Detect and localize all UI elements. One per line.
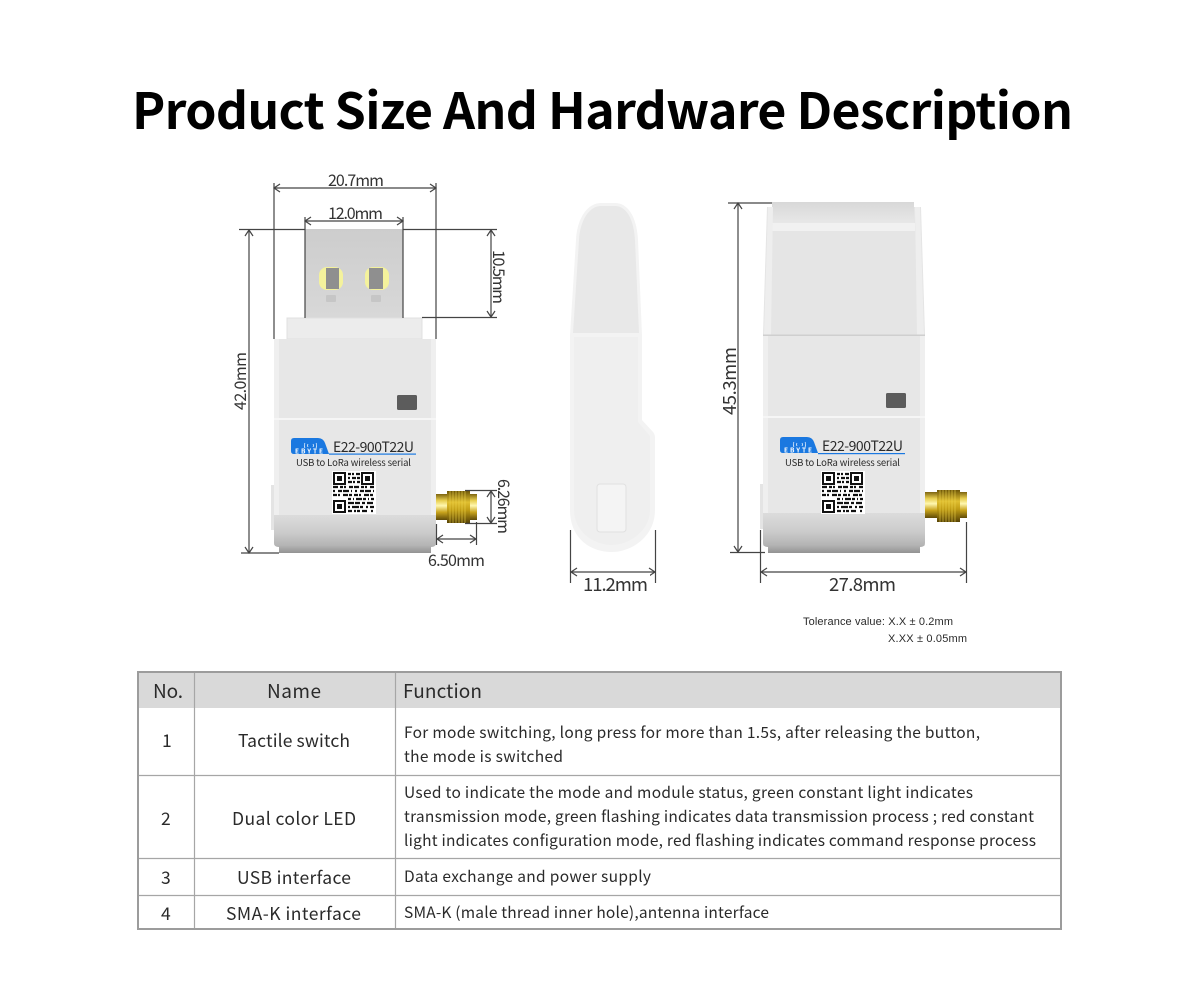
row 3	[161, 865, 651, 890]
product label: USB to LoRa wireless serial	[296, 455, 411, 469]
row 2: Dual color LED	[232, 806, 356, 831]
header row: Name	[267, 677, 321, 704]
dimension: 20.7mm: 20.7mm	[328, 167, 384, 191]
row 3: 3	[161, 865, 171, 890]
row 1: 1	[162, 728, 172, 753]
tolerance note: X.XX ± 0.05mm	[888, 633, 967, 645]
dimension: 6.26mm: 6.26mm	[493, 479, 517, 534]
title: Product Size And Hardware Description	[132, 72, 1073, 144]
device body	[760, 336, 925, 553]
panel: front view with USB plug	[227, 167, 517, 571]
dimension: 42.0mm	[227, 230, 305, 553]
dimension: 27.8mm: 27.8mm	[829, 571, 896, 597]
product label	[780, 436, 905, 469]
product label	[291, 437, 416, 469]
header row: Function	[403, 677, 482, 704]
side button	[597, 484, 626, 532]
tolerance note: Tolerance value: X.X ± 0.2mm	[803, 616, 953, 628]
dimension: 6.50mm: 6.50mm	[428, 547, 485, 571]
dimension: 45.3mm	[716, 203, 772, 552]
header row	[153, 677, 482, 704]
dimension: 11.2mm: 11.2mm	[583, 571, 648, 597]
dimension: 10.5mm	[403, 230, 512, 318]
dimension: 20.7mm	[274, 167, 436, 339]
dimension: 11.2mm	[570, 530, 656, 597]
row 4: 4	[161, 901, 171, 926]
USB cap shading	[573, 206, 639, 333]
row 1	[162, 721, 980, 767]
header row: No.	[153, 677, 183, 704]
device body	[271, 339, 436, 553]
row 2: light indicates configuration mode, red flashing indicates command response process	[404, 829, 1036, 851]
collar	[287, 318, 422, 339]
product label: E22-900T22U	[822, 436, 903, 456]
side body shading	[574, 337, 650, 545]
dimension: 42.0mm: 42.0mm	[227, 352, 251, 410]
row 4: SMA-K interface	[226, 901, 361, 926]
row 4	[161, 901, 769, 926]
device cap	[763, 202, 925, 336]
QR code	[821, 471, 865, 514]
product label: USB to LoRa wireless serial	[785, 455, 900, 469]
table header background	[138, 672, 1061, 708]
row 1: For mode switching, long press for more than 1.5s, after releasing the button,	[404, 721, 980, 743]
dimension: 6.50mm	[428, 522, 485, 571]
row 1: Tactile switch	[238, 728, 350, 753]
table: hardware description	[138, 672, 1061, 929]
QR code	[332, 471, 376, 514]
row 2: Used to indicate the mode and module status, green constant light indicates	[404, 781, 973, 803]
tolerance note	[803, 616, 967, 645]
dimension: 27.8mm	[760, 522, 966, 597]
SMA connector	[436, 491, 477, 523]
dimension: 12.0mm: 12.0mm	[328, 200, 383, 224]
side view casing	[570, 203, 655, 552]
product label: E22-900T22U	[333, 437, 414, 457]
row 3: USB interface	[237, 865, 351, 890]
SMA connector	[925, 490, 967, 522]
dimension: 10.5mm: 10.5mm	[488, 250, 512, 304]
USB plug	[305, 229, 403, 318]
dimension: 6.26mm	[465, 479, 517, 534]
row 1: the mode is switched	[404, 745, 563, 767]
row 2: 2	[161, 806, 171, 831]
row 2	[161, 781, 1036, 851]
row 2: transmission mode, green flashing indicates data transmission process ; red constant	[404, 805, 1034, 827]
dimension: 12.0mm	[305, 200, 403, 318]
product label: EBYTE	[295, 446, 323, 456]
row 4: SMA-K (male thread inner hole),antenna interface	[404, 901, 769, 923]
panel: back view with cap	[716, 202, 967, 645]
panel: side view	[570, 203, 656, 597]
dimension: 45.3mm: 45.3mm	[716, 347, 742, 415]
product label: EBYTE	[784, 444, 812, 454]
row 3: Data exchange and power supply	[404, 865, 651, 887]
